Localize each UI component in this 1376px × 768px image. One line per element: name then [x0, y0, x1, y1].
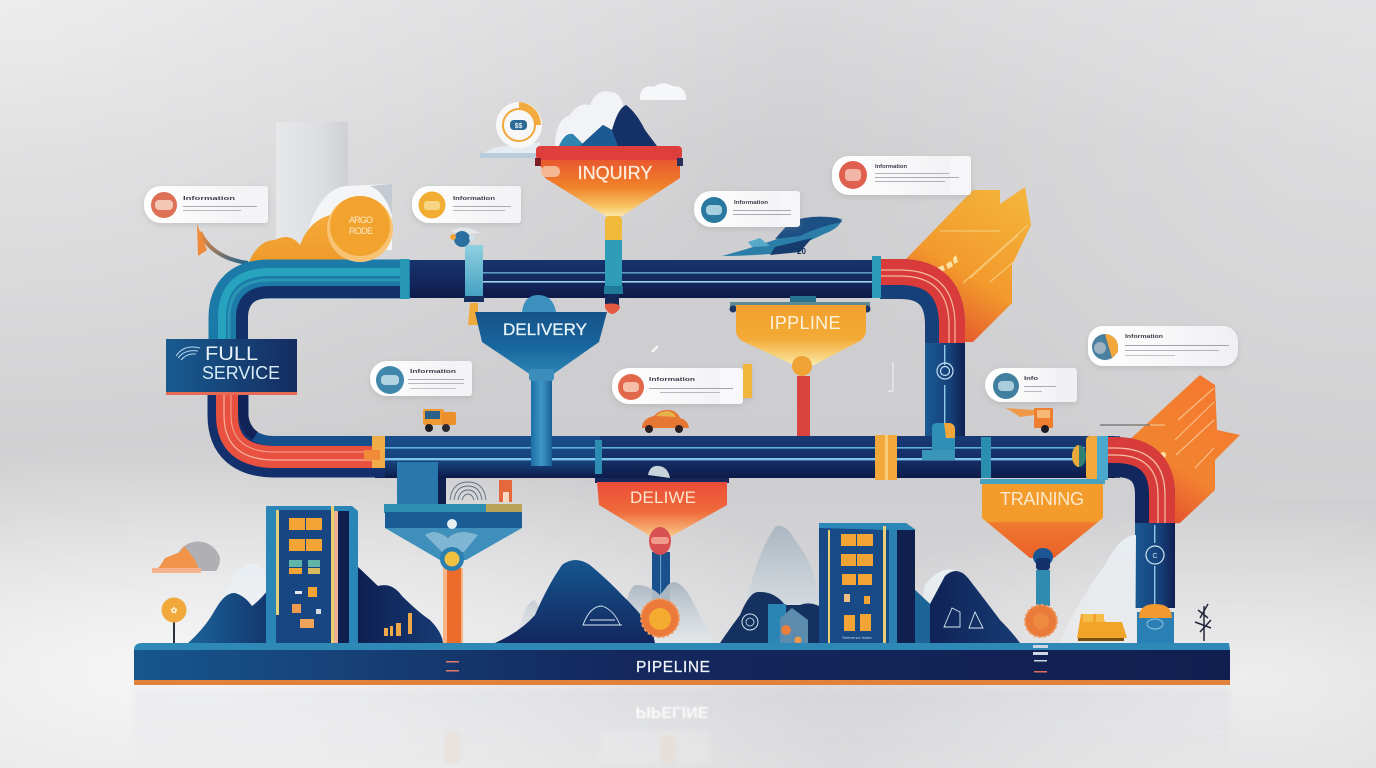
reflection on floor: PIPELINE	[636, 703, 709, 720]
callout 4	[832, 156, 971, 195]
mountains, navy foreground	[188, 560, 1020, 644]
funnel stem	[604, 216, 623, 314]
funnel: delivery	[475, 295, 607, 466]
callout 3: Information	[734, 200, 769, 206]
cloud, small left	[152, 542, 220, 573]
icon: fingerprint	[450, 482, 486, 500]
funnel: delive: DELIWE	[630, 488, 696, 507]
base platform: PIPELINE	[636, 659, 710, 676]
icon: yellow train cart	[1077, 614, 1127, 641]
large orange wing, lower right	[1100, 375, 1240, 525]
windows	[841, 534, 873, 631]
icon: yellow signpost	[162, 598, 186, 643]
icon: orange car	[642, 410, 689, 433]
reflection on floor	[134, 688, 1230, 764]
funnel: ipeline: IPPLINE	[770, 313, 840, 333]
icon: orange truck	[423, 409, 456, 432]
building right	[819, 523, 916, 643]
callout 5	[370, 361, 472, 396]
large orange wing, upper right	[905, 187, 1031, 342]
building right: Reference Index	[842, 635, 872, 640]
valve on lower pipe under upper right vertical	[922, 423, 955, 460]
icon: forklift	[1006, 408, 1053, 433]
callout 2: Information	[453, 196, 496, 202]
label: full service: FULL	[205, 344, 258, 365]
icon: airplane: 20	[797, 247, 806, 256]
base platform	[134, 643, 1230, 685]
vertical pipe, upper right	[925, 343, 965, 439]
lower right red elbow	[1072, 436, 1165, 527]
vertical pipe, lower right: C	[1152, 553, 1158, 560]
callout 1	[144, 186, 268, 223]
funnel stem	[440, 547, 464, 650]
coin badge: ARGO	[349, 215, 373, 225]
funnel: delive	[595, 466, 729, 606]
windows	[289, 518, 322, 628]
pump housing at bottom of right pipe	[1137, 604, 1174, 643]
label: full service: SERVICE	[202, 363, 280, 383]
funnel: ipeline	[730, 296, 870, 436]
funnel stem	[529, 369, 554, 466]
orange cloud and white paper behind coin	[248, 184, 392, 264]
icon: airplane	[722, 217, 842, 256]
distant pale mountains	[205, 526, 1136, 643]
callout 4: Information	[875, 164, 908, 170]
callout 2	[412, 186, 521, 223]
callout 1: Information	[183, 196, 236, 202]
funnel stem	[1033, 548, 1053, 606]
upper pipe run	[222, 259, 890, 345]
coin badge	[327, 196, 393, 262]
icon: line art huts	[583, 606, 983, 628]
label: full service	[166, 339, 297, 395]
building left	[266, 506, 358, 643]
funnel: delivery: DELIVERY	[503, 320, 587, 339]
icon: inquiry ring badge	[496, 102, 542, 148]
funnel: inquiry	[535, 146, 683, 314]
funnel: left lower with fingerprint	[384, 462, 522, 650]
callout 6: Information	[649, 377, 696, 383]
callout 8: Information	[1125, 334, 1164, 340]
funnel: inquiry mountains and clouds	[480, 83, 686, 158]
coin badge: RODE	[349, 226, 373, 236]
callout 8	[1088, 326, 1238, 366]
funnel stem	[649, 527, 671, 606]
lower pipe run	[375, 435, 1120, 480]
callout 5: Information	[410, 369, 457, 375]
callout 3	[694, 191, 800, 227]
connector valve with globe	[450, 227, 484, 325]
icon: small black tree	[1195, 604, 1211, 641]
icon: yellow signpost: ✿	[171, 606, 178, 615]
icon: inquiry ring badge: $$	[515, 123, 522, 130]
callout 7	[985, 368, 1077, 402]
upper right red elbow	[872, 256, 955, 345]
callout 7: Info	[1024, 376, 1039, 382]
arrow from bubble to pipe	[197, 224, 248, 263]
callout 6	[612, 364, 752, 404]
icon: orange flower right	[1025, 605, 1057, 637]
funnel: training: TRAINING	[1000, 489, 1084, 509]
tall pale cylinder	[276, 122, 348, 247]
icon: orange flower left	[641, 599, 679, 637]
funnel stem	[792, 356, 812, 436]
funnel: training	[980, 479, 1105, 606]
small tick marks	[652, 346, 893, 391]
funnel: inquiry: INQUIRY	[578, 163, 652, 183]
lower left red elbow	[224, 392, 385, 468]
vertical pipe, lower right	[1135, 523, 1175, 608]
icon: signal arcs	[176, 347, 200, 360]
